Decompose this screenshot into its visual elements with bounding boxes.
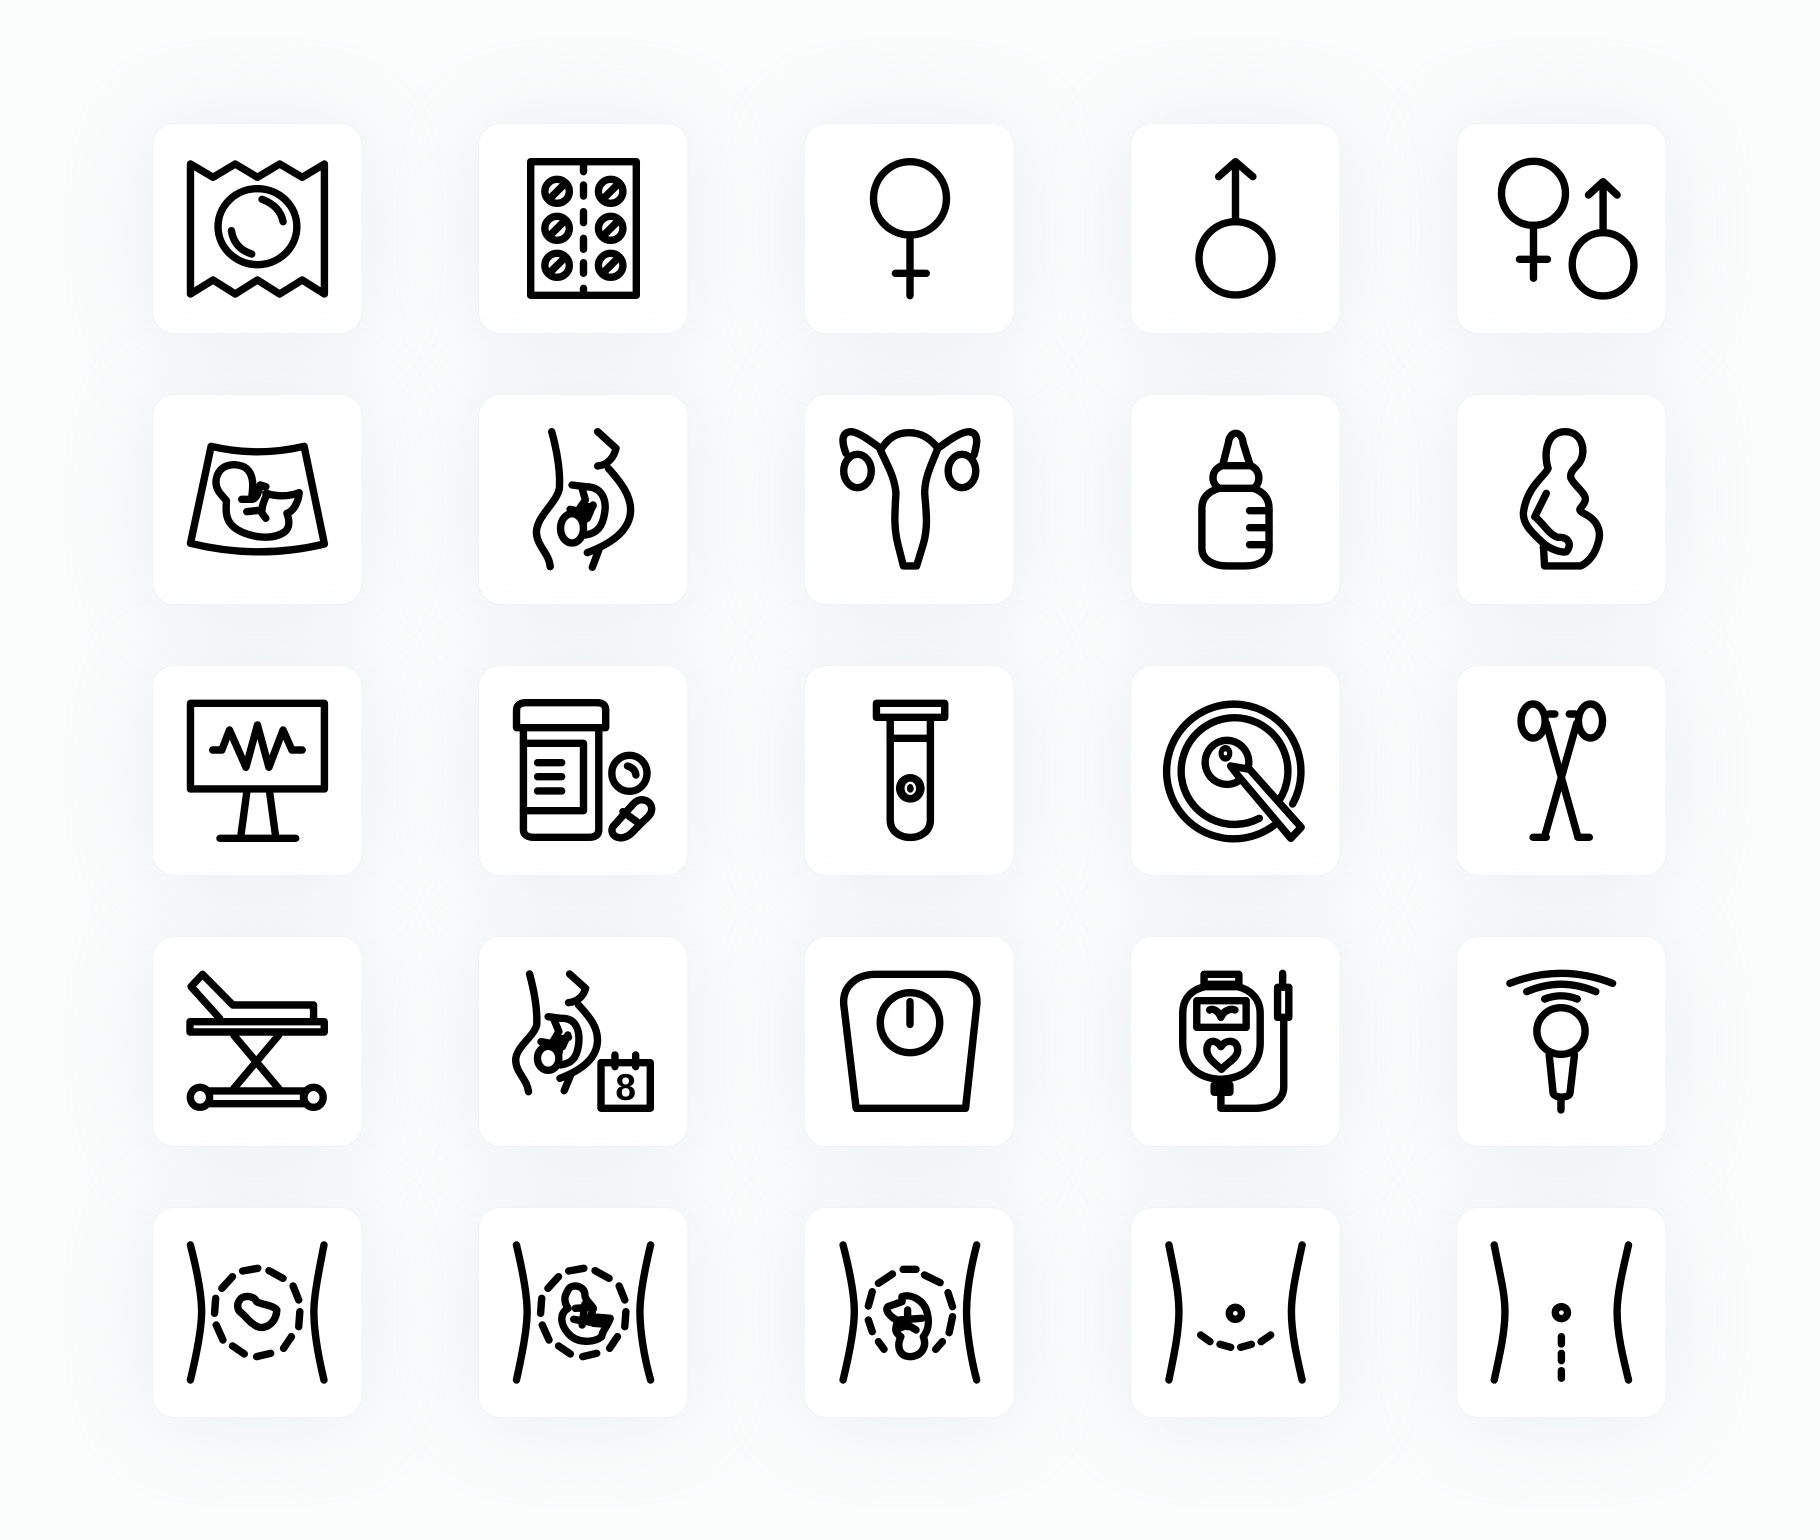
- panel: ultrasound scan card: [152, 394, 362, 604]
- icon: fetal heart monitor: [1183, 973, 1289, 1108]
- icon: pregnancy week 8 calendar: [516, 974, 650, 1108]
- panel: embryo early stage card: [152, 1208, 362, 1418]
- panel: forceps card: [1456, 666, 1666, 876]
- panel: pregnant side view card: [478, 394, 688, 604]
- icon: baby bottle: [1202, 433, 1269, 566]
- panel: female and male symbols card: [1456, 124, 1666, 334]
- panel: fetus head down card: [804, 1208, 1014, 1418]
- panel: baby bottle card: [1130, 394, 1340, 604]
- panel: caesarean incision card: [1130, 1208, 1340, 1418]
- panel: stretcher card: [152, 936, 362, 1146]
- icon: abdomen with early embryo: [190, 1245, 324, 1380]
- icon: abdomen with head-down fetus: [843, 1245, 977, 1380]
- panel: weight scale card: [804, 936, 1014, 1146]
- icon: condom wrapper: [190, 164, 324, 294]
- icon: male symbol: [1199, 162, 1272, 295]
- icon: ultrasound scan: [190, 446, 324, 552]
- panel: fetal monitor card: [1130, 936, 1340, 1146]
- icon: abdomen with developing fetus: [516, 1245, 651, 1380]
- icon: hospital stretcher: [190, 974, 324, 1107]
- panel: heart monitor card: [152, 666, 362, 876]
- icon: surgical forceps: [1521, 704, 1603, 837]
- icon: ultrasound probe: [1510, 973, 1613, 1110]
- panel: vertical incision card: [1456, 1208, 1666, 1418]
- panel: male symbol card: [1130, 124, 1340, 334]
- icon: heart rate monitor: [190, 703, 324, 838]
- panel: due date card: [478, 936, 688, 1146]
- icon: abdomen with horizontal incision: [1169, 1245, 1302, 1380]
- panel: pill blister card: [478, 124, 688, 334]
- panel: egg and needle card: [1130, 666, 1340, 876]
- icon: uterus: [843, 432, 977, 566]
- panel: condom card: [152, 124, 362, 334]
- panel: ultrasound probe card: [1456, 936, 1666, 1146]
- icon: medicine bottle and pills: [517, 703, 652, 838]
- icon: pill blister pack: [531, 162, 636, 295]
- panel: test tube card: [804, 666, 1014, 876]
- panel: fetus developing card: [478, 1208, 688, 1418]
- panel: uterus card: [804, 394, 1014, 604]
- panel: female symbol card: [804, 124, 1014, 334]
- icon: test tube with embryo: [876, 703, 945, 837]
- icon: female symbol: [874, 162, 946, 296]
- icon: egg fertilization needle: [1167, 704, 1301, 839]
- panel: pregnant woman card: [1456, 394, 1666, 604]
- icon: female and male symbols: [1502, 161, 1634, 296]
- icon: pregnant woman silhouette: [1523, 432, 1599, 566]
- icon: abdomen with vertical incision: [1494, 1245, 1629, 1380]
- icon: pregnant torso with fetus: [536, 432, 631, 567]
- icon: pregnancy week 8 calendar: 8: [615, 1067, 636, 1108]
- icon: weight scale: [844, 974, 977, 1108]
- panel: medicine bottle card: [478, 666, 688, 876]
